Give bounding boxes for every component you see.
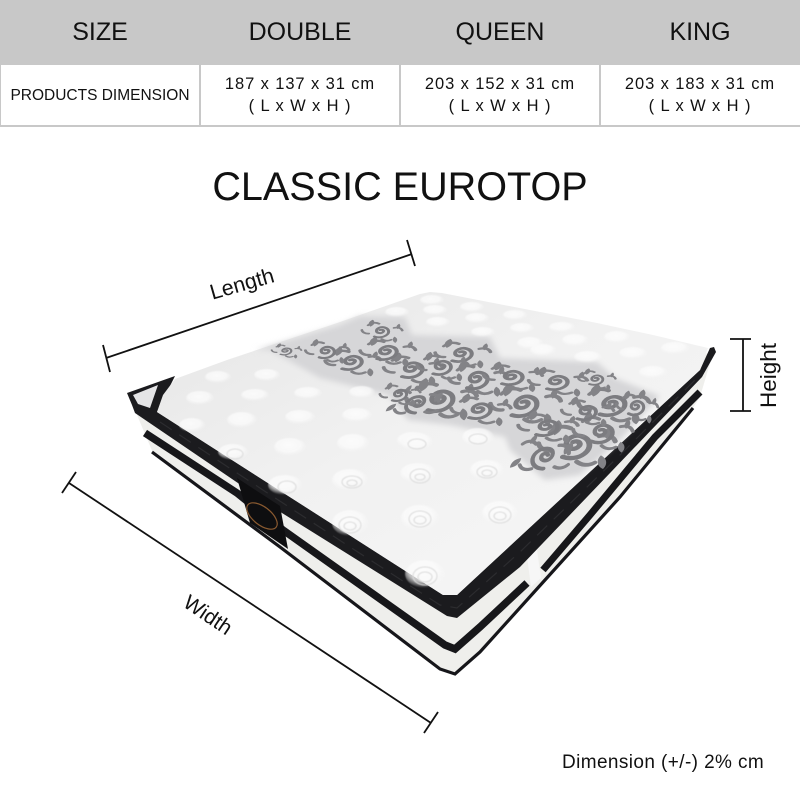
header: king: KING	[669, 18, 731, 46]
double dimensions: ( L x W x H )	[249, 97, 351, 115]
header: double: DOUBLE	[249, 18, 351, 46]
king dimensions: ( L x W x H )	[649, 97, 751, 115]
band stitching texture	[160, 375, 700, 608]
corner label	[133, 385, 158, 408]
dimension: width	[62, 472, 438, 733]
length label: Length	[207, 263, 277, 305]
dimple swirls	[227, 434, 511, 585]
quilting dimples	[179, 295, 689, 588]
row label: PRODUCTS DIMENSION	[10, 87, 190, 104]
mattress pillow-top band	[127, 347, 716, 618]
tolerance note: Dimension (+/-) 2% cm	[562, 752, 764, 773]
width label: Width	[179, 591, 236, 640]
logo patch	[237, 478, 288, 549]
mattress side panels	[132, 353, 713, 674]
mattress	[127, 292, 716, 674]
queen dimensions: ( L x W x H )	[449, 97, 551, 115]
double dimensions: 187 x 137 x 31 cm	[225, 75, 375, 93]
header: size: SIZE	[72, 18, 128, 46]
height label: Height	[756, 342, 781, 408]
queen dimensions: 203 x 152 x 31 cm	[425, 75, 575, 93]
dimension: length	[103, 240, 415, 372]
header: queen: QUEEN	[456, 18, 544, 46]
table header band	[0, 0, 800, 65]
dimension: height	[730, 339, 781, 411]
quilted top surface	[157, 292, 708, 595]
table row: products dimension	[0, 65, 800, 127]
damask pattern	[255, 316, 663, 480]
king dimensions: 203 x 183 x 31 cm	[625, 75, 775, 93]
title: CLASSIC EUROTOP	[212, 165, 588, 209]
